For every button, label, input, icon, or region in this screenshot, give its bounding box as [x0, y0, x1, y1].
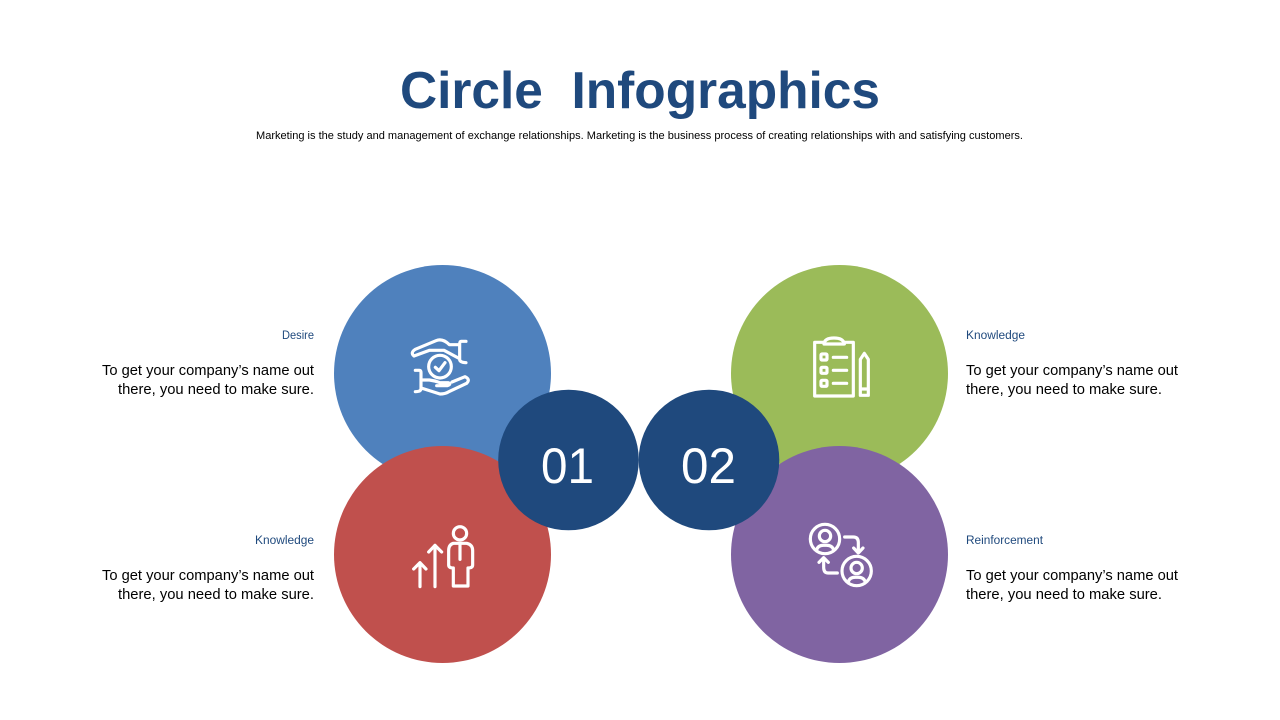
- subtitle: Marketing is the study and management of exchange relationships. Marketing is the business process of creating relationships with and satisfying customers.: [256, 130, 1023, 142]
- circle: red: [334, 446, 551, 663]
- badge: 02: 02: [681, 438, 736, 494]
- text block: bottom left: there, you need to make sure.: [118, 586, 314, 603]
- icon: hands holding check: [412, 340, 468, 394]
- text block: top right: [966, 362, 1179, 398]
- icon: users exchange: [810, 524, 871, 586]
- label: Reinforcement: Reinforcement: [966, 535, 1044, 547]
- text block: bottom right: [966, 567, 1179, 603]
- circle: blue: [334, 265, 551, 482]
- label: Knowledge left: Knowledge: [255, 535, 314, 547]
- label: Knowledge right: Knowledge: [966, 330, 1025, 342]
- title: Circle Infographics: [400, 62, 880, 120]
- text block: bottom right: there, you need to make sure.: [966, 586, 1162, 603]
- label: Desire: Desire: [282, 330, 314, 342]
- text block: bottom right: To get your company’s name out: [966, 567, 1179, 584]
- circle: purple: [731, 446, 948, 663]
- text block: top right: there, you need to make sure.: [966, 381, 1162, 398]
- text block: top right: To get your company’s name out: [966, 362, 1179, 379]
- text block: top left: To get your company’s name out: [102, 362, 315, 379]
- badge: 02: [639, 390, 779, 530]
- circle: green: [731, 265, 948, 482]
- icon: person with rising arrows: [414, 527, 473, 587]
- text block: top left: there, you need to make sure.: [118, 381, 314, 398]
- text block: top left: [102, 362, 315, 398]
- badge: 01: [498, 390, 639, 530]
- text block: bottom left: To get your company’s name out: [102, 567, 315, 584]
- text block: bottom left: [102, 567, 315, 603]
- icon: clipboard and pencil: [815, 338, 868, 396]
- badge: 01: 01: [541, 438, 594, 494]
